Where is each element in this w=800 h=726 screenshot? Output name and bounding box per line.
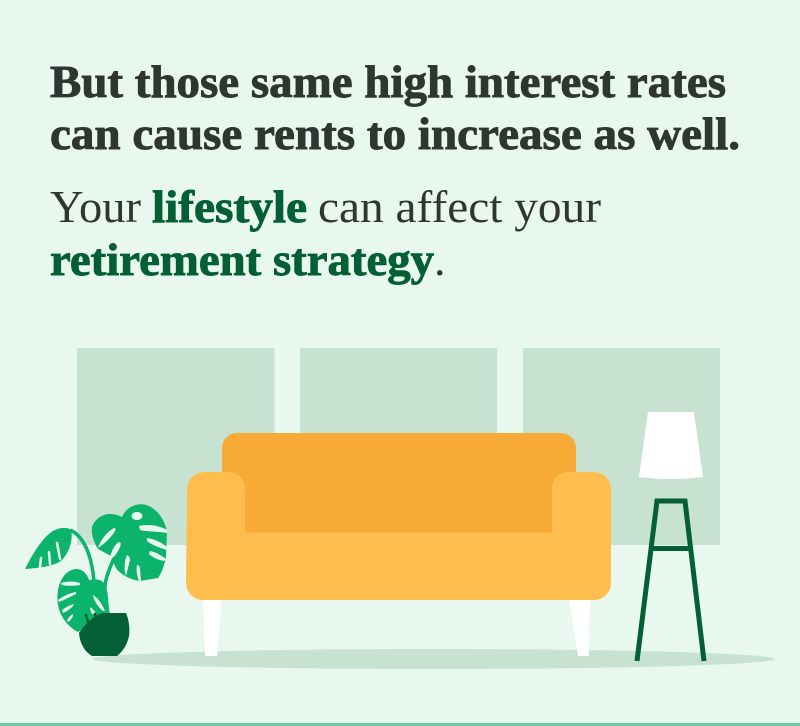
subheading: lifestyle and retirement strategy	[50, 181, 601, 285]
heading: interest rates statement: But those same high interest rates	[50, 56, 726, 107]
windows	[77, 348, 720, 545]
lamp stand	[637, 501, 704, 661]
floor shadow	[93, 649, 775, 669]
plant pot	[79, 613, 129, 656]
sofa back	[222, 433, 576, 543]
subheading: lifestyle and retirement strategy: Your	[50, 181, 141, 232]
sofa legs	[203, 598, 590, 656]
heading: interest rates statement: can cause rents to increase as well.	[50, 108, 740, 159]
leaf: left	[25, 528, 72, 569]
subheading: lifestyle and retirement strategy: retirement strategy	[50, 234, 434, 285]
leaf: lower	[57, 569, 108, 632]
sofa seat and arms	[186, 472, 611, 600]
leaf: top right	[92, 504, 167, 581]
subheading: lifestyle and retirement strategy: can affect your	[318, 181, 601, 232]
subheading: lifestyle and retirement strategy: lifestyle	[152, 181, 307, 232]
sofa	[186, 433, 611, 656]
subheading: lifestyle and retirement strategy: .	[434, 234, 446, 285]
heading: interest rates statement	[50, 56, 740, 159]
lamp shade	[639, 412, 703, 479]
potted plant	[25, 504, 167, 656]
floor lamp	[637, 412, 704, 661]
plant stems	[70, 530, 114, 614]
